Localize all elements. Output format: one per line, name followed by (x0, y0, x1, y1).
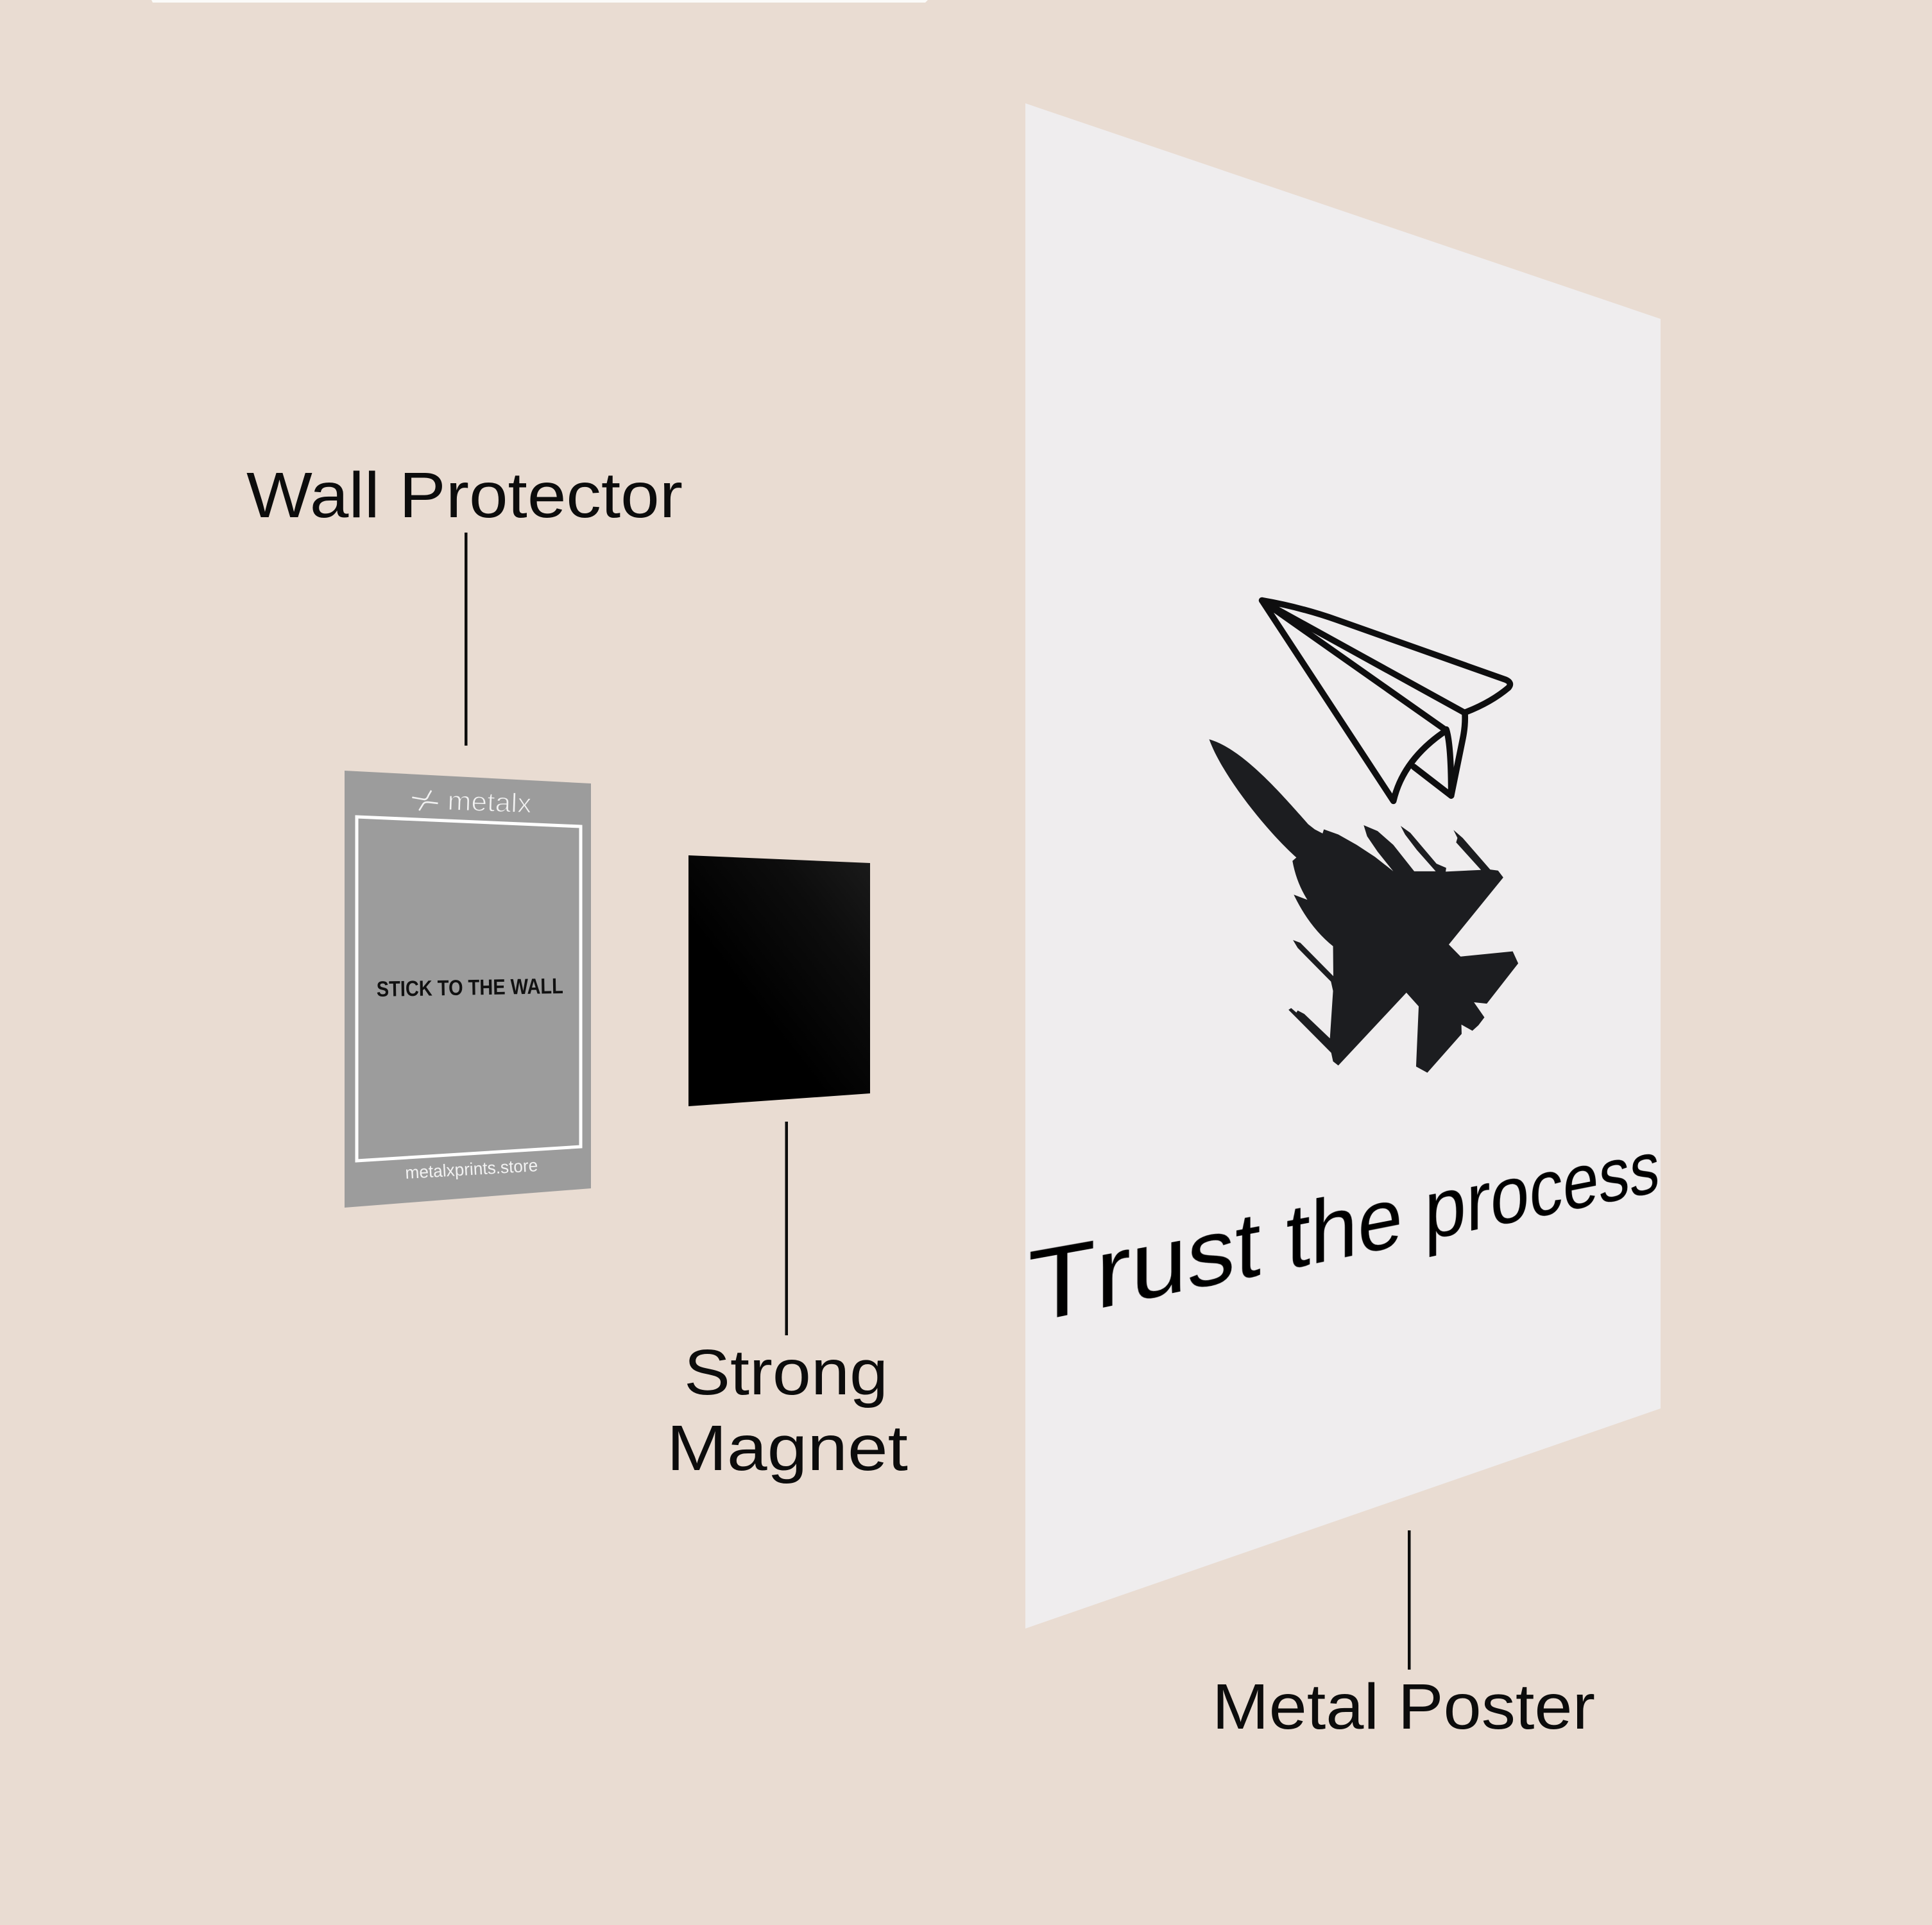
poster slogan in perspective: Trust the process (1028, 1125, 1659, 1346)
panel: metal poster (1025, 103, 1661, 1629)
panel: strong magnet (688, 855, 870, 1106)
protector instruction text: STICK TO THE WALL (376, 974, 563, 1002)
website text: metalxprints.store (405, 1156, 538, 1183)
leader line: wall protector (465, 533, 467, 746)
leader line: metal poster (1408, 1530, 1410, 1670)
label: strong magnet: Magnet (667, 1412, 908, 1484)
label: metal poster: Metal Poster (1212, 1671, 1595, 1743)
label: wall protector: Wall Protector (246, 459, 683, 531)
icon: paper plane (1262, 601, 1510, 801)
leader line: strong magnet (785, 1122, 788, 1335)
white strip at top edge (151, 0, 928, 3)
label: strong magnet: Strong (684, 1337, 888, 1408)
label: strong magnet (667, 1337, 908, 1484)
logo wordmark: metalx (447, 785, 532, 819)
icon: fighter jet silhouette (1209, 739, 1518, 1073)
icon: metalx logo mark (412, 791, 438, 810)
panel: wall protector (345, 771, 591, 1208)
inner frame (357, 817, 581, 1161)
